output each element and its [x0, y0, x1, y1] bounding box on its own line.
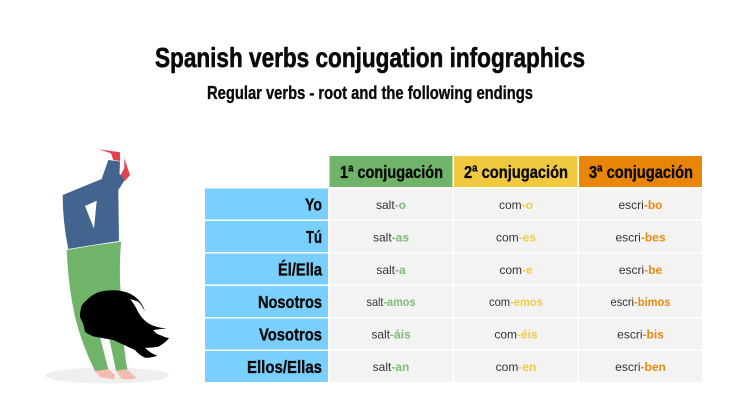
- row: Él/Ella: salt-a: [376, 263, 406, 277]
- row: Vosotros: Vosotros: [259, 324, 322, 344]
- header: 2ª conjugación: 2ª conjugación: [464, 162, 568, 182]
- row: Vosotros: com-éis: [494, 328, 538, 342]
- header: 1ª conjugación: 1ª conjugación: [340, 162, 443, 182]
- illustration: person doing a handstand: [45, 149, 169, 384]
- row: Yo: [205, 188, 702, 220]
- row: Él/Ella: Él/Ella: [278, 258, 322, 280]
- black hair: [80, 290, 169, 358]
- blue jeans: [63, 160, 126, 249]
- shadow: [45, 368, 169, 384]
- row: Él/Ella: com-e: [499, 263, 533, 277]
- feet: [95, 369, 137, 380]
- title: Spanish verbs conjugation infographics: [155, 42, 585, 73]
- header: 1ª conjugación: [330, 156, 452, 187]
- row: Tú: com-es: [496, 230, 536, 244]
- row: Ellos/Ellas: Ellos/Ellas: [247, 357, 322, 377]
- row: Yo: Yo: [305, 194, 322, 214]
- row: Vosotros: escri-bis: [617, 328, 664, 342]
- green trousers: [67, 242, 127, 371]
- row: Ellos/Ellas: com-en: [496, 360, 536, 374]
- row: Nosotros: Nosotros: [258, 292, 322, 312]
- row: Vosotros: [205, 318, 702, 350]
- row: Ellos/Ellas: salt-an: [373, 360, 409, 374]
- header: 2ª conjugación: [454, 156, 578, 187]
- red shoes: [98, 149, 130, 181]
- row: Nosotros: com-emos: [489, 295, 543, 309]
- row: Ellos/Ellas: [205, 351, 702, 382]
- row: Tú: salt-as: [373, 230, 409, 244]
- row: Vosotros: salt-áis: [371, 328, 411, 342]
- row: Él/Ella: [205, 254, 702, 284]
- row: Nosotros: escri-bimos: [610, 295, 671, 309]
- subtitle: Regular verbs - root and the following endings: [207, 83, 533, 103]
- table: [205, 156, 702, 382]
- row: Tú: [205, 221, 702, 252]
- row: Nosotros: salt-amos: [366, 295, 416, 309]
- row: Yo: escri-bo: [618, 198, 662, 212]
- row: Tú: Tú: [306, 227, 322, 247]
- header: 3ª conjugación: [579, 156, 702, 187]
- row: Tú: escri-bes: [615, 230, 666, 244]
- row: Yo: salt-o: [376, 198, 406, 212]
- row: Él/Ella: escri-be: [619, 263, 662, 277]
- row: Ellos/Ellas: escri-ben: [615, 360, 666, 374]
- header: 3ª conjugación: 3ª conjugación: [589, 162, 693, 182]
- row: Nosotros: [205, 286, 702, 317]
- row: Yo: com-o: [499, 198, 533, 212]
